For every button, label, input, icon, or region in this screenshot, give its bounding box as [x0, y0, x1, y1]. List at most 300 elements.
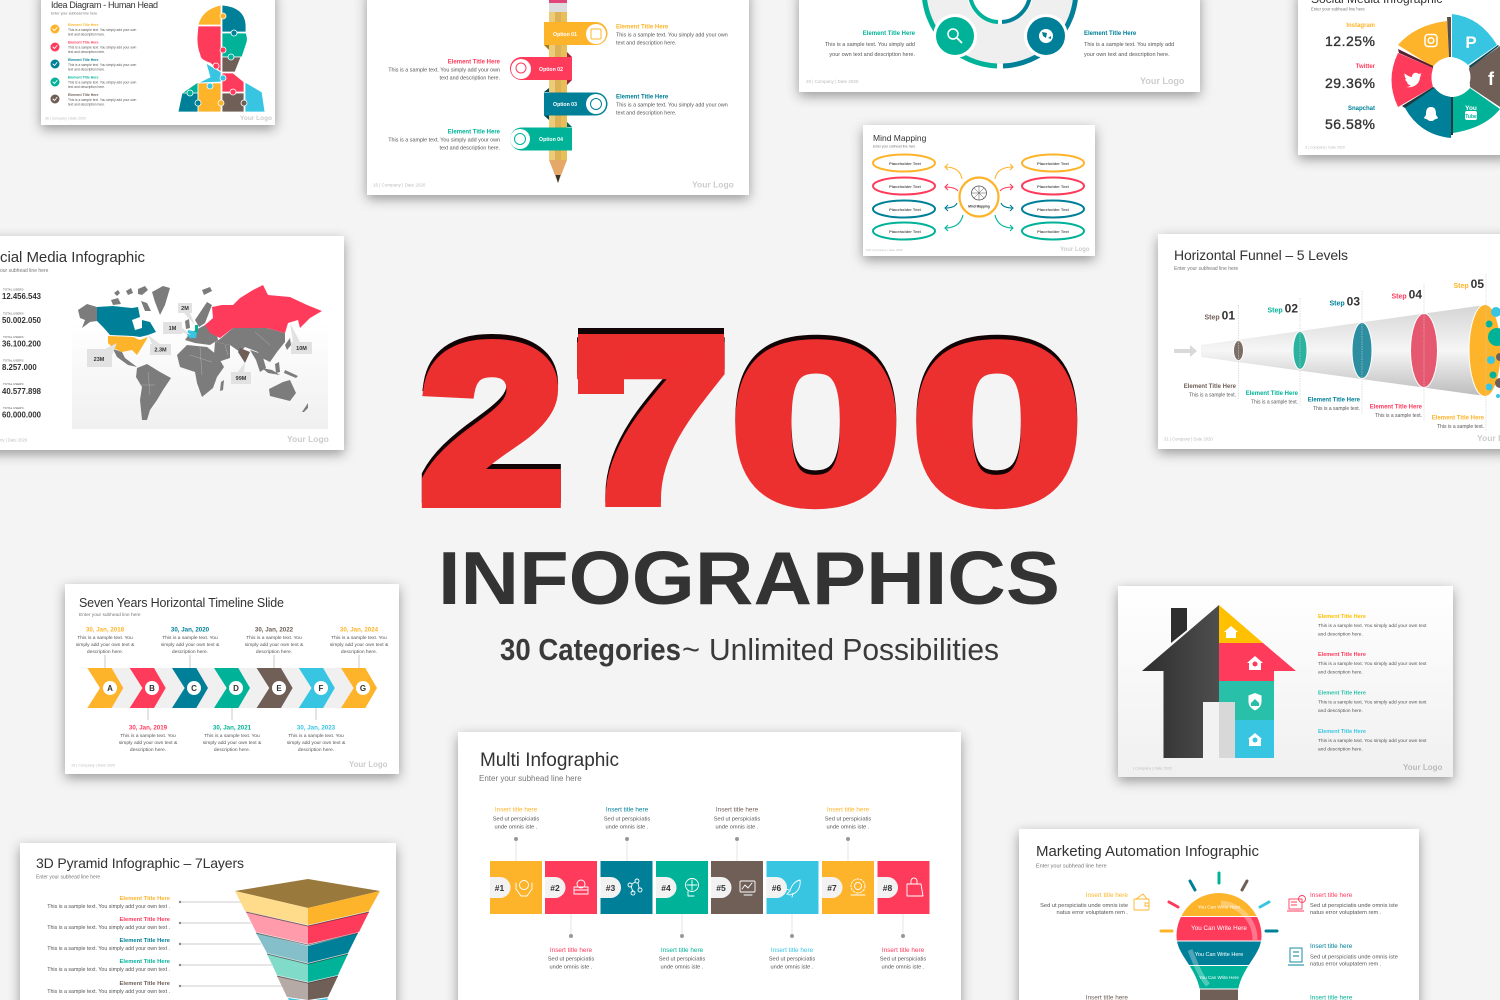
bulb labels: You Can Write Here — [1191, 925, 1247, 932]
callout labels — [94, 306, 307, 382]
bulb labels: You Can Write Here — [1198, 904, 1241, 910]
icon: analytics — [1287, 896, 1306, 911]
text block: element 1: and description here. — [1318, 632, 1363, 638]
bottom labels: Sed ut perspiciatis — [769, 956, 815, 962]
bottom dates: 30, Jan, 2023 — [297, 724, 336, 732]
footer: 31 | Company | Date 2020 — [1164, 436, 1213, 442]
text block: element 2 — [388, 60, 501, 82]
tile row: #5 — [716, 883, 726, 893]
panel: social media world map — [0, 236, 344, 450]
element labels: This is a sample text. — [1375, 413, 1422, 419]
oval labels: Placeholder Text — [889, 229, 922, 234]
text block: element 3: This is a sample text. You simply add your own text — [1318, 700, 1427, 706]
bottom dates: 30, Jan, 2021 — [213, 724, 252, 732]
heading: marketing: Marketing Automation Infographic — [1036, 843, 1260, 860]
text block: element 2: text and description here. — [439, 76, 500, 82]
callout labels: 10M — [296, 346, 307, 352]
logo: Your Logo — [287, 434, 329, 444]
stats list: 60.000.000 — [2, 410, 42, 420]
text block: orange — [1040, 892, 1128, 916]
text block: red: Sed ut perspiciatis unde omnis iste — [1310, 903, 1398, 909]
puzzle head figure — [178, 5, 265, 112]
step labels: Step 04 — [1392, 288, 1422, 302]
top dates: simply add your own text & — [76, 642, 135, 648]
subhead: Enter your subhead line here — [1311, 6, 1365, 12]
panel: marketing automation — [1019, 829, 1419, 1000]
text block: left element: your own text and description here. — [829, 52, 915, 58]
tile row: #3 — [606, 883, 615, 893]
bottom dates: simply add your own text & — [287, 740, 346, 746]
step labels — [1205, 277, 1484, 322]
icon: youtube: Tube — [1465, 114, 1477, 120]
ribbon: option 03 — [544, 88, 608, 120]
heading: mind mapping: Mind Mapping — [873, 133, 927, 143]
element labels: Element Title Here — [1246, 391, 1299, 397]
tile row: #7 — [827, 883, 837, 893]
step labels: Step 03 — [1330, 294, 1360, 308]
heading: multi: Multi Infographic — [480, 750, 619, 771]
bottom labels: unde omnis iste . — [770, 964, 814, 970]
text block: element 4: and description here. — [1318, 746, 1363, 752]
bottom labels: Sed ut perspiciatis — [880, 956, 926, 962]
top labels: Insert title here — [827, 806, 870, 814]
light rays — [1161, 873, 1277, 931]
element labels: Element Title Here — [1308, 398, 1361, 404]
top dates: description here. — [172, 649, 208, 655]
icon: house 1 — [1224, 626, 1238, 638]
headline number 2700: 0 — [911, 294, 1083, 546]
oval labels — [889, 161, 1070, 234]
top labels: Insert title here — [606, 806, 649, 814]
bottom dates: simply add your own text & — [119, 740, 178, 746]
text block: element 1 — [1318, 614, 1427, 638]
bottom dates: simply add your own text & — [203, 740, 262, 746]
text block: element 3 — [1318, 690, 1427, 714]
text block: red: Insert title here — [1310, 892, 1353, 899]
top dates: This is a sample text. You — [162, 635, 218, 641]
text block: left element: This is a sample text. You simply add — [825, 42, 915, 48]
top labels: Insert title here — [716, 806, 759, 814]
ribbon: option 01 — [544, 22, 608, 50]
leader dots — [179, 901, 181, 987]
oval labels: Placeholder Text — [1037, 184, 1070, 189]
headline number 2700: 7 — [573, 295, 729, 543]
stat: snapchat: Snapchat — [1348, 106, 1375, 112]
labels: elements: Element Title Here — [120, 917, 171, 923]
stats list: TOTAL USERS — [3, 382, 23, 386]
text block: right element — [1084, 31, 1174, 58]
footer: 29 | Company | Date 2020 — [806, 79, 859, 84]
list: five checked elements — [50, 23, 137, 107]
top labels: unde omnis iste . — [826, 824, 870, 830]
subhead: Enter your subhead line here — [36, 874, 100, 880]
text block: element 2 — [1318, 652, 1427, 676]
labels: elements: This is a sample text. You simply add your own text . — [47, 925, 170, 931]
heading: pyramid: 3D Pyramid Infographic – 7Layers — [36, 855, 244, 871]
element labels: This is a sample text. — [1313, 406, 1360, 412]
dashed guides — [1238, 274, 1486, 431]
footer: 15 | Company | Date 2020 — [373, 182, 426, 188]
headline word INFOGRAPHICS: INFOGRAPHICS — [438, 536, 1060, 620]
text block: teal: Insert title here — [1310, 943, 1353, 950]
callout labels: 1M — [169, 326, 177, 332]
panel: human head idea diagram — [41, 0, 275, 125]
text block: element 2: This is a sample text. You simply add your own text — [1318, 661, 1427, 667]
stat: twitter — [1325, 64, 1376, 91]
labels: elements: Element Title Here — [120, 938, 171, 944]
chevron band: D — [233, 684, 239, 693]
list: five checked elements: text and description here. — [68, 32, 105, 36]
step labels: Step 01 — [1205, 308, 1235, 322]
labels: elements: This is a sample text. You simply add your own text . — [47, 904, 170, 910]
ribbon: option 01: Option 01 — [553, 32, 577, 38]
labels: elements: This is a sample text. You simply add your own text . — [47, 989, 170, 995]
text block: element 2: Element Title Here — [448, 60, 501, 66]
labels: elements: This is a sample text. You simply add your own text . — [47, 946, 170, 952]
bottom dates — [119, 724, 346, 753]
text block: element 3: and description here. — [1318, 708, 1363, 714]
icon: wallet — [1134, 894, 1149, 910]
leader lines — [180, 902, 282, 986]
oval labels: Placeholder Text — [889, 207, 922, 212]
tile row: #4 — [661, 883, 671, 893]
bulb labels: You Can Write Here — [1195, 952, 1243, 958]
connector dots — [514, 837, 905, 938]
top dates: simply add your own text & — [330, 642, 389, 648]
step labels: Step 02 — [1268, 302, 1298, 316]
icon: scroll — [1288, 948, 1304, 965]
element labels: This is a sample text. — [1251, 400, 1298, 406]
world map — [72, 285, 328, 429]
top dates: description here. — [341, 649, 377, 655]
headline number 2700: 0 — [730, 299, 902, 550]
element labels: This is a sample text. — [1437, 424, 1484, 430]
labels: elements: Element Title Here — [120, 981, 171, 987]
footer: 36 | Company | Date 2020 — [45, 116, 86, 120]
list: five checked elements: text and description here. — [68, 85, 105, 89]
icon: globe — [1024, 14, 1068, 58]
text block: element 1: text and description here. — [616, 40, 677, 46]
chevron band: B — [149, 684, 155, 693]
panel: horizontal funnel — [1158, 234, 1500, 449]
tile row — [490, 861, 930, 914]
list: five checked elements: This is a sample text. You simply add your own — [68, 63, 137, 67]
oval labels: Placeholder Text — [889, 161, 922, 166]
bottom labels: Insert title here — [771, 947, 814, 954]
chevron band: F — [319, 684, 324, 693]
top dates: description here. — [256, 649, 292, 655]
top labels — [493, 806, 871, 830]
stats list: TOTAL USERS — [3, 335, 23, 339]
panel: social media pie — [1298, 0, 1500, 155]
panel: seven years timeline — [65, 584, 399, 774]
bottom labels: Sed ut perspiciatis — [659, 956, 705, 962]
labels: elements: Element Title Here — [120, 959, 171, 965]
top labels: Sed ut perspiciatis — [493, 816, 539, 822]
text block: orange: Sed ut perspiciatis unde omnis iste — [1040, 903, 1128, 909]
heading: funnel: Horizontal Funnel – 5 Levels — [1174, 247, 1348, 263]
text block: orange: natus error voluptatem rem . — [1057, 910, 1128, 916]
tagline: ~ — [682, 632, 700, 667]
icon: facebook: f — [1488, 69, 1495, 89]
chevron band: C — [191, 684, 197, 693]
stats list: 36.100.200 — [2, 340, 42, 348]
top dates: simply add your own text & — [161, 642, 220, 648]
top dates: simply add your own text & — [245, 642, 304, 648]
text block: element 4 — [1318, 729, 1427, 752]
bottom labels: Sed ut perspiciatis — [548, 956, 594, 962]
text block: element 1: Element Title Here — [1318, 614, 1366, 620]
subhead: Enter your subhead line here — [51, 12, 97, 16]
panel: multi infographic — [458, 732, 961, 1000]
icon: youtube: You — [1465, 105, 1477, 112]
oval labels: Placeholder Text — [1037, 229, 1070, 234]
subhead: Enter your subhead line here — [479, 774, 582, 783]
list: five checked elements: This is a sample text. You simply add your own — [68, 80, 137, 84]
heading: human head: Idea Diagram - Human Head — [51, 0, 158, 10]
element labels: Element Title Here — [1370, 404, 1423, 410]
headline number 2700: 2 — [421, 300, 563, 548]
labels: elements: Element Title Here — [120, 896, 171, 902]
connectors — [516, 839, 903, 936]
text block: element 1: Element Title Here — [616, 24, 669, 30]
text block: element 4: Element Title Here — [1318, 729, 1366, 735]
text block: red — [1310, 892, 1398, 916]
tagline: Unlimited Possibilities — [709, 632, 999, 667]
oval labels: Placeholder Text — [1037, 161, 1070, 166]
text block: red: natus error voluptatem rem . — [1310, 910, 1382, 916]
top dates: description here. — [87, 649, 123, 655]
icon: twitter — [1404, 73, 1422, 87]
element labels: Element Title Here — [1184, 384, 1237, 390]
stat: twitter: 29.36% — [1325, 75, 1375, 91]
icon: instagram — [1425, 34, 1437, 46]
tagline — [500, 632, 999, 667]
headline number 2700: 0 — [911, 299, 1083, 550]
subhead: Enter your subhead line here — [873, 144, 916, 148]
stats list: TOTAL USERS — [3, 312, 23, 316]
ring diagram — [924, 0, 1076, 66]
logo: Your Logo — [1140, 76, 1185, 86]
top dates: 30, Jan, 2024 — [340, 626, 379, 634]
text block: element 2: and description here. — [1318, 670, 1363, 676]
bottom dates: description here. — [298, 747, 334, 753]
callout labels: 2.3M — [154, 348, 167, 354]
text block: left element: Element Title Here — [863, 31, 916, 37]
text block: left element — [825, 31, 916, 58]
text block: element 4: text and description here. — [439, 146, 500, 152]
text block: orange: Insert title here — [1086, 892, 1128, 899]
list: five checked elements: This is a sample text. You simply add your own — [68, 28, 137, 32]
connector stems — [105, 655, 359, 720]
logo: Your Logo — [1403, 763, 1443, 772]
stat: instagram: Instagram — [1346, 23, 1375, 29]
headline number 2700: 2 — [421, 295, 563, 543]
element labels — [1184, 384, 1485, 430]
ribbon: option 04: Option 04 — [539, 137, 563, 143]
icon: house 2 — [1247, 656, 1263, 670]
icon: snapchat — [1424, 107, 1438, 121]
bottom dates: This is a sample text. You — [120, 733, 176, 739]
chevron band: A — [107, 684, 113, 693]
pencil illustration — [549, 0, 567, 183]
stats list: 40.577.898 — [2, 387, 42, 396]
heading: timeline: Seven Years Horizontal Timeline Slide — [79, 596, 284, 610]
bottom labels: Insert title here — [661, 947, 704, 954]
stats list: 50.002.050 — [2, 316, 42, 325]
bottom labels: unde omnis iste . — [882, 964, 925, 970]
top dates: This is a sample text. You — [77, 635, 133, 641]
top dates: 30, Jan, 2018 — [86, 626, 125, 634]
icon: youtube — [1465, 105, 1477, 120]
centre brain node — [960, 178, 998, 216]
stats list: 12.456.543 — [2, 292, 42, 301]
light bulb — [1176, 893, 1262, 1000]
list: five checked elements: Element Title Here — [68, 58, 99, 62]
logo: Your Logo — [349, 760, 388, 769]
stat: snapchat — [1325, 106, 1375, 132]
list: five checked elements: This is a sample text. You simply add your own — [68, 46, 137, 50]
footer: | Company | Date 2020 — [1133, 766, 1172, 770]
element labels: This is a sample text. — [1189, 392, 1236, 398]
centre brain node: Mind Mapping — [968, 204, 990, 208]
footer: 19 | Company | Date 2020 — [71, 764, 115, 768]
heading: map: cial Media Infographic — [0, 249, 146, 266]
bottom dates: This is a sample text. You — [204, 733, 260, 739]
tile row: #2 — [550, 883, 560, 893]
left ovals — [873, 154, 1084, 240]
inverted pyramid — [235, 879, 380, 1000]
callout labels: 23M — [94, 357, 105, 363]
oval labels: Placeholder Text — [1037, 207, 1070, 212]
element labels: Element Title Here — [1432, 416, 1485, 422]
icon: magnifier — [933, 14, 977, 58]
logo: Your Logo — [692, 180, 734, 190]
text block: teal: natus error voluptatem rem . — [1310, 962, 1382, 968]
list: five checked elements: Element Title Here — [68, 23, 99, 27]
top labels: unde omnis iste . — [606, 824, 649, 830]
stat: instagram: 12.25% — [1325, 33, 1375, 49]
tile row: #1 — [495, 883, 504, 893]
chevron band: E — [276, 684, 282, 693]
text block: element 3: text and description here. — [616, 110, 677, 116]
text block: right element: Element Title Here — [1084, 31, 1137, 37]
bottom labels: Insert title here — [550, 947, 593, 954]
bottom labels: unde omnis iste . — [660, 964, 704, 970]
subhead: Enter your subhead line here — [79, 612, 141, 618]
bottom dates: This is a sample text. You — [288, 733, 344, 739]
list: five checked elements: Element Title Here — [68, 93, 99, 97]
text block: element 4: This is a sample text. You simply add your own text — [1318, 738, 1427, 744]
text block: right element: your own text and description here. — [1084, 52, 1170, 58]
subhead: Enter your subhead line here — [1174, 266, 1238, 272]
stats list — [2, 288, 42, 420]
text block: element 3: Element Title Here — [1318, 690, 1366, 696]
tile row: #8 — [883, 883, 892, 893]
subhead: our subhead line here — [0, 268, 49, 274]
callouts — [87, 303, 312, 384]
text block: element 3: Element Title Here — [616, 94, 669, 100]
stats list: TOTAL USERS — [3, 406, 23, 410]
bottom dates: description here. — [130, 747, 166, 753]
stat: snapchat: 56.58% — [1325, 116, 1375, 132]
text block: element 2: Element Title Here — [1318, 652, 1366, 658]
panel: 3D pyramid — [20, 843, 396, 1000]
ribbon: option 02 — [510, 52, 572, 85]
headline number 2700 — [421, 294, 1083, 550]
text block: element 4 — [388, 130, 501, 152]
tile icons — [516, 878, 923, 897]
pie chart — [1392, 14, 1500, 138]
stat: twitter: Twitter — [1356, 64, 1376, 70]
oval labels: Placeholder Text — [889, 184, 922, 189]
top dates: This is a sample text. You — [246, 635, 302, 641]
text block: element 1: This is a sample text. You simply add your own text — [1318, 623, 1427, 629]
logo: Your Logo — [240, 115, 272, 122]
top labels: Insert title here — [495, 806, 538, 814]
text block: element 1: This is a sample text. You simply add your own — [616, 32, 728, 38]
ribbon: option 03: Option 03 — [553, 102, 577, 108]
ribbon: option 02: Option 02 — [539, 67, 563, 73]
stat: instagram — [1325, 23, 1375, 49]
footer: 105 | Company | Date 2020 — [866, 248, 903, 252]
top labels: unde omnis iste . — [494, 824, 538, 830]
top labels: unde omnis iste . — [716, 824, 759, 830]
top dates — [76, 626, 389, 655]
subhead: Enter your subhead line here — [1036, 864, 1107, 870]
top dates: 30, Jan, 2022 — [255, 626, 294, 634]
text block: right element: This is a sample text. You simply add — [1084, 42, 1174, 48]
text block: element 1 — [616, 24, 728, 46]
panel: pencil infographic — [367, 0, 749, 195]
funnel cone — [1201, 304, 1500, 398]
top labels: Sed ut perspiciatis — [714, 816, 760, 822]
arrow — [1174, 345, 1197, 357]
icon: house bulb — [1248, 733, 1262, 746]
tagline: 30 Categories — [500, 632, 681, 667]
bottom labels: unde omnis iste . — [550, 964, 593, 970]
bulb labels — [1191, 904, 1247, 980]
chevron band — [87, 668, 377, 708]
bulb labels: You Can Write Here — [1199, 975, 1239, 980]
stats list: TOTAL USERS — [3, 288, 23, 292]
labels: elements: This is a sample text. You simply add your own text . — [47, 967, 170, 973]
panel: circular infographic — [799, 0, 1200, 92]
bottom labels: Insert title here — [882, 947, 925, 954]
icon: pinterest: P — [1465, 33, 1477, 52]
logo: Your Logo — [1060, 247, 1090, 253]
stats list: TOTAL USERS — [3, 358, 23, 362]
list: five checked elements: text and description here. — [68, 102, 105, 106]
callout labels: 99M — [236, 376, 247, 382]
list: five checked elements: This is a sample text. You simply add your own — [68, 98, 137, 102]
callout labels: 2M — [181, 306, 189, 312]
panel: mind mapping — [863, 125, 1095, 256]
text block: element 3: This is a sample text. You simply add your own — [616, 102, 728, 108]
text block: teal — [1310, 943, 1398, 968]
stats list: 8.257.000 — [2, 363, 37, 372]
list: five checked elements: Element Title Here — [68, 76, 99, 80]
labels: elements — [47, 896, 171, 995]
footer: ny | Date 2020 — [0, 438, 28, 442]
panel: house infographic — [1118, 586, 1453, 777]
headline number 2700: 0 — [730, 294, 902, 546]
ribbon: option 04 — [510, 122, 572, 150]
text block: element 2: This is a sample text. You simply add your own — [388, 68, 500, 74]
list: five checked elements: Element Title Here — [68, 41, 99, 45]
text block: element 4: This is a sample text. You simply add your own — [388, 138, 500, 144]
curved arrows — [945, 164, 1013, 231]
